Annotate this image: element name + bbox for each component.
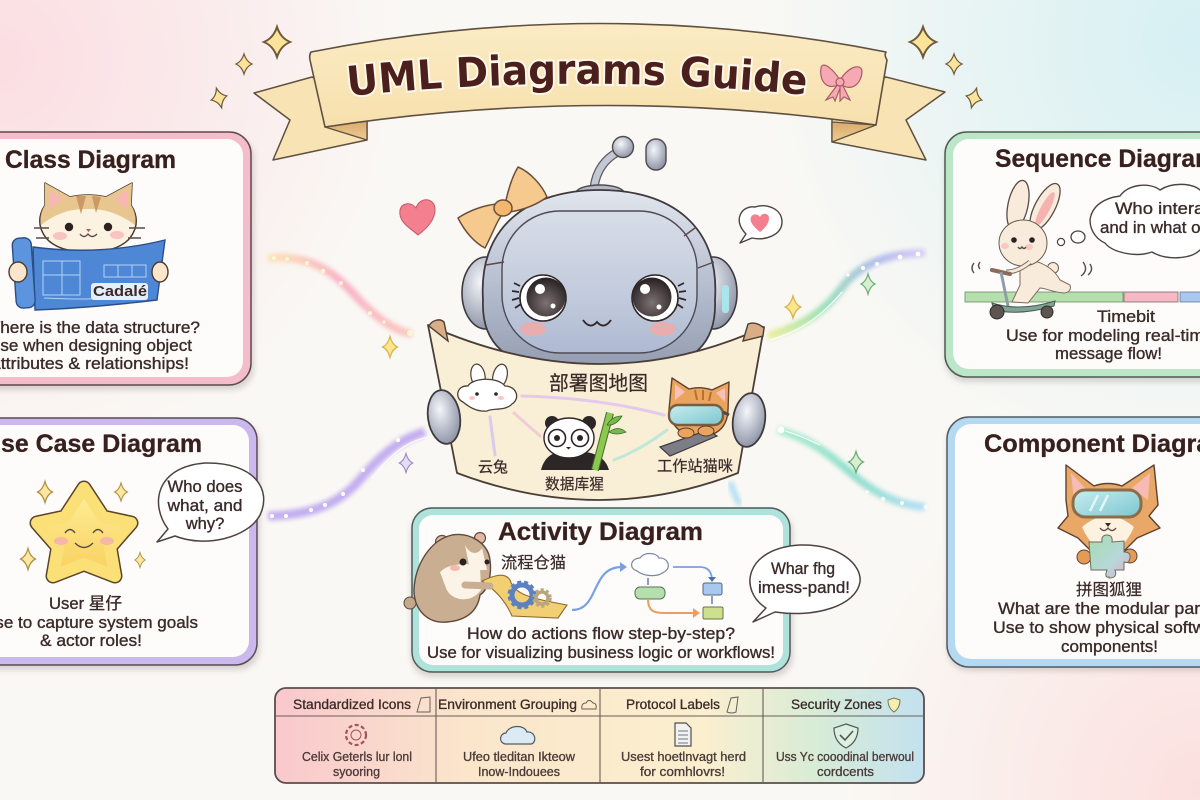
body text: components! xyxy=(1061,638,1158,656)
title banner xyxy=(253,22,946,161)
column: standardized icons: Standardized Icons xyxy=(293,697,411,712)
flowchart xyxy=(572,554,723,619)
scroll map xyxy=(428,320,764,500)
body text: Timebit xyxy=(1097,308,1155,326)
column: protocol labels: Protocol Labels xyxy=(626,697,720,712)
body text: message flow! xyxy=(1055,345,1162,363)
map labels: 数据库猩 xyxy=(545,476,604,493)
column: standardized icons: syooring xyxy=(333,765,380,779)
banner left fold xyxy=(325,121,367,140)
column: protocol labels xyxy=(621,697,746,779)
map title: 部署图地图 xyxy=(549,372,648,395)
sparkles beside trails xyxy=(383,274,875,472)
banner right fold xyxy=(832,122,876,142)
icon: goggles cat at keyboard xyxy=(660,378,729,456)
column: protocol labels: Usest hoetlnvagt herd xyxy=(621,750,746,764)
node: green pill xyxy=(635,587,665,599)
panel frame xyxy=(947,417,1200,671)
robot face xyxy=(520,320,676,336)
speech bubble: Who does xyxy=(168,478,242,496)
panel: activity diagram xyxy=(404,508,860,677)
sparkles around title xyxy=(209,27,984,110)
column: security zones xyxy=(776,697,914,779)
column: environment grouping: Inow-Indouees xyxy=(478,765,560,779)
body text: Use for modeling real-time xyxy=(1006,327,1200,345)
map links xyxy=(490,396,667,460)
icon: heart xyxy=(400,200,435,235)
column: security zones: cordcents xyxy=(817,765,874,779)
column: environment grouping xyxy=(438,697,596,779)
icon: hamster with document xyxy=(404,532,567,622)
map labels: 工作站猫咪 xyxy=(657,458,733,475)
node: green box xyxy=(703,607,723,619)
speech bubble: why? xyxy=(185,515,224,533)
icon: antenna xyxy=(576,136,666,201)
icon: ears xyxy=(462,257,737,329)
panel frame xyxy=(411,508,793,677)
panel: class diagram xyxy=(0,132,254,390)
speech bubble: what, and xyxy=(166,497,242,515)
icon: heart speech bubble xyxy=(739,206,782,243)
column: protocol labels: for comhlovrs! xyxy=(640,765,725,779)
icon: rabbit on scooter xyxy=(972,178,1092,319)
arrow: trail class to robot xyxy=(268,256,413,336)
arrow: trail use case to robot xyxy=(268,432,428,518)
icon: gears xyxy=(509,582,550,608)
body text: Use for visualizing business logic or workflows! xyxy=(427,644,775,662)
heading: Activity Diagram xyxy=(498,518,703,546)
node: blue box xyxy=(703,583,722,595)
column: standardized icons xyxy=(293,697,430,779)
robot screen xyxy=(502,211,697,353)
icon: cloud node xyxy=(632,554,668,576)
thought bubble xyxy=(1057,184,1200,258)
icon: fox with puzzle xyxy=(1058,465,1160,578)
robot head xyxy=(483,190,715,366)
arrow: trail robot to activity xyxy=(730,482,740,505)
column: environment grouping: Ufeo tleditan Ikteow xyxy=(463,750,576,764)
panel frame xyxy=(0,418,260,670)
icon: pink bow xyxy=(821,65,862,101)
body text: 拼图狐狸 xyxy=(1076,581,1142,599)
panel: use case diagram xyxy=(0,418,264,670)
icon: panda with bamboo xyxy=(541,413,626,470)
body text: User 星仔 xyxy=(49,594,122,613)
map labels xyxy=(478,458,733,493)
arrow: trail robot to component xyxy=(778,427,928,509)
heading: Class Diagram xyxy=(5,146,176,174)
panel frame xyxy=(945,132,1200,382)
title: UML Diagrams Guide xyxy=(346,52,808,98)
panel: component diagram xyxy=(947,417,1200,671)
legend table xyxy=(275,688,924,783)
banner left tail xyxy=(254,77,367,160)
icon: cloud bunny xyxy=(458,363,517,411)
speech bubble xyxy=(157,463,264,542)
icon: orange bow xyxy=(458,167,547,248)
robot eyes xyxy=(512,275,686,321)
panel frame xyxy=(0,132,254,390)
hamster label: 流程仓猫 xyxy=(501,554,566,572)
banner right tail xyxy=(832,77,945,160)
icon: star with sparkles xyxy=(21,482,145,576)
timeline xyxy=(965,292,1200,302)
column: standardized icons: Celix Geterls lur lonl xyxy=(302,750,412,764)
column: security zones: Security Zones xyxy=(791,697,882,712)
robot mascot with map xyxy=(400,136,782,500)
speech bubble: Whar fhg xyxy=(771,560,835,578)
table frame xyxy=(275,688,924,783)
arrow: trail robot to sequence xyxy=(768,252,925,340)
flow arrow xyxy=(572,567,622,610)
robot hands xyxy=(424,388,769,449)
column: environment grouping: Environment Grouping xyxy=(438,697,577,712)
banner body xyxy=(310,24,887,127)
icon: cat with blueprint xyxy=(9,183,168,310)
column: security zones: Uss Yc cooodinal berwoul xyxy=(776,750,914,764)
speech bubble: imess-pand! xyxy=(758,579,850,597)
map labels: 云兔 xyxy=(478,459,508,476)
panel: sequence diagram xyxy=(945,132,1200,382)
body text: How do actions flow step-by-step? xyxy=(467,625,735,643)
speech bubble xyxy=(750,545,860,622)
blueprint label: Cadalé xyxy=(93,284,147,300)
body text: & actor roles! xyxy=(40,632,142,650)
